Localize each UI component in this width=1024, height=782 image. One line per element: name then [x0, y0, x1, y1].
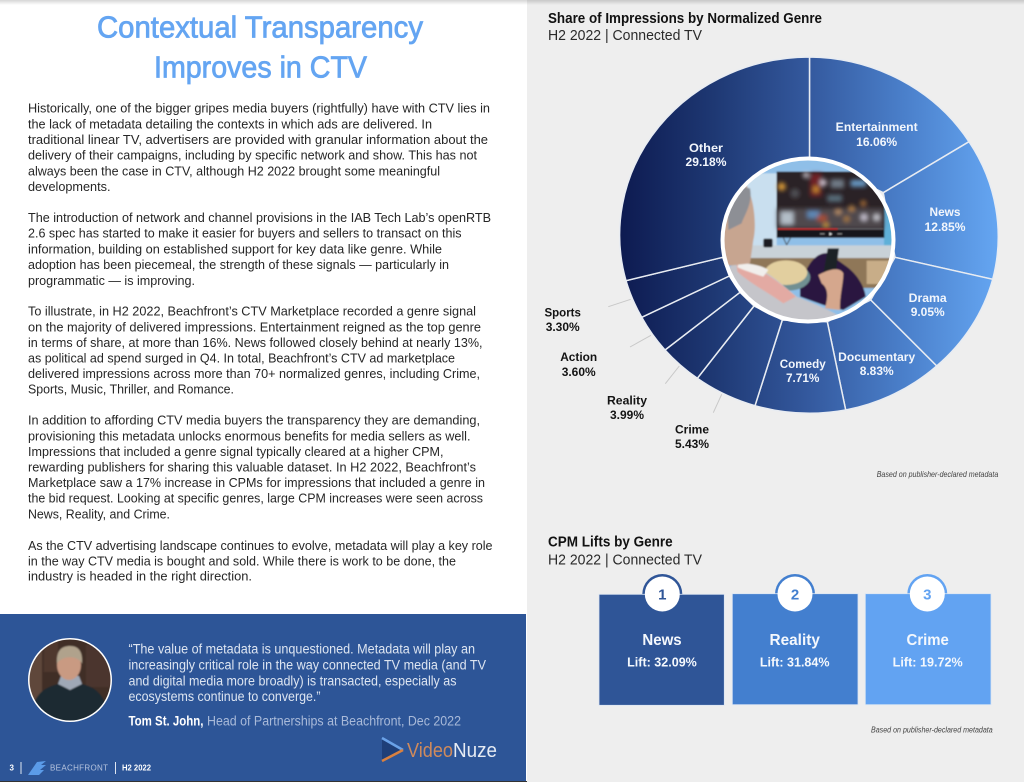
card: Reality: Lift: 31.84%: [760, 656, 830, 670]
card: Reality: [732, 574, 858, 705]
photo: Tom St. John headshot: [28, 638, 112, 722]
label: Other: Other: [689, 141, 723, 155]
title: [97, 10, 423, 84]
label: Drama: Drama: [909, 291, 947, 305]
hand and remote: [824, 248, 840, 272]
text block: paragraph 3: in terms of share, at more than 16%. News followed closely behind at nearly 13%,: [28, 335, 482, 350]
card: Reality: Reality: [770, 632, 820, 649]
segment: Crime: [697, 306, 782, 406]
label: Other: 29.18%: [686, 155, 727, 169]
label: Sports: 3.30%: [546, 320, 580, 334]
label: Drama: [909, 291, 947, 319]
text block: paragraph 5: industry is headed in the right direction.: [28, 569, 252, 584]
quote text: [128, 642, 486, 704]
label: Action: Action: [560, 350, 597, 364]
logo: VideoNuze: [382, 738, 497, 762]
segment: News: [883, 142, 998, 279]
heading: share of impressions: Share of Impressions by Normalized Genre: [548, 11, 822, 27]
label: News: News: [930, 205, 961, 219]
text block: paragraph 3: Sports, Music, Thriller, and Romance.: [28, 382, 234, 396]
source note: cards: Based on publisher-declared metadata: [871, 724, 993, 734]
text block: paragraph 1: traditional linear TV, advertisers are provided with granular information about the: [28, 132, 488, 147]
source note: chart: Based on publisher-declared metadata: [877, 469, 999, 479]
card: News: 1: [658, 586, 666, 604]
leader line: Crime: [713, 394, 722, 413]
quote attribution: Tom St. John,: [128, 714, 204, 728]
label: Documentary: Documentary: [838, 350, 916, 364]
text block: paragraph 1: Historically, one of the bigger gripes media buyers (rightfully) have with CTV lies in: [28, 101, 490, 116]
leader line: Reality: [665, 366, 679, 384]
card: News: Lift: 32.09%: [627, 656, 697, 670]
quote attribution: Head of Partnerships at Beachfront, Dec 2022: [207, 714, 461, 728]
text block: paragraph 4: Marketplace saw a 17% increase in CPMs for impressions that included a genre in: [28, 475, 485, 490]
text block: paragraph 4: In addition to affording CTV media buyers the transparency they are demanding,: [28, 413, 480, 428]
text block: paragraph 2: [28, 210, 491, 288]
leader line: Sports: [608, 299, 631, 307]
right page background: [527, 0, 1024, 782]
label: Entertainment: Entertainment: [836, 120, 918, 134]
legs and cushion: [843, 297, 900, 327]
label: Reality: 3.99%: [610, 408, 644, 422]
quote text: and digital media more broadly) is transacted, especially as: [128, 673, 457, 688]
quote text: ecosystems continue to converge.”: [128, 689, 320, 704]
footer: page number and Beachfront brand: 3: [10, 764, 14, 772]
text block: paragraph 4: Impressions that included a genre signal typically cleared at a higher CPM,: [28, 444, 444, 459]
quote text: increasingly critical role in the way connected TV media (and TV: [128, 658, 486, 673]
text block: paragraph 2: information, building on established support for key data like genre. While: [28, 242, 442, 256]
text block: paragraph 4: rewarding publishers for sharing this valuable dataset. In H2 2022, Beachfront’s: [28, 460, 476, 474]
text block: paragraph 2: 2.6 spec has started to make it easier for buyers and sellers to transact on this: [28, 226, 462, 241]
footer: page number and Beachfront brand: [10, 761, 152, 775]
label: Documentary: 8.83%: [860, 364, 894, 378]
TV screen: [777, 172, 884, 238]
segment: Documentary: [827, 300, 937, 410]
text block: paragraph 3: on the majority of delivered impressions. Entertainment reigned as the top genre: [28, 319, 481, 334]
furniture: [743, 245, 897, 259]
segment: Action: [642, 276, 740, 350]
text block: paragraph 5: As the CTV advertising landscape continues to evolve, metadata will play a key role: [28, 538, 492, 553]
footer: page number and Beachfront brand: H2 2022: [122, 764, 152, 772]
text block: paragraph 2: The introduction of network and channel provisions in the IAB Tech Lab’s openRTB: [28, 210, 491, 225]
photo: person watching TV with popcorn: [720, 153, 900, 327]
card: Crime: Lift: 19.72%: [893, 656, 963, 670]
text block: paragraph 2: programmatic — is improving.: [28, 273, 195, 288]
text block: paragraph 2: adoption has been piecemeal, the strength of these signals — particularly in: [28, 257, 449, 272]
text block: paragraph 5: [28, 538, 492, 584]
text block: paragraph 4: provisioning this metadata unlocks enormous benefits for media sellers as well.: [28, 428, 470, 443]
quote text: “The value of metadata is unquestioned. Metadata will play an: [128, 642, 475, 657]
text block: paragraph 4: the bid request. Looking at specific genres, large CPM increases were seen across: [28, 491, 483, 506]
text block: paragraph 3: as political ad spend surged in Q4. In total, Beachfront’s CTV ad marketplace: [28, 351, 455, 366]
label: Entertainment: [836, 120, 918, 149]
heading: share of impressions: [548, 11, 822, 44]
label: Sports: [544, 306, 581, 334]
segment: Sports: [626, 257, 729, 317]
person: [730, 264, 838, 320]
card: News: News: [642, 632, 682, 649]
label: News: 12.85%: [924, 220, 966, 234]
card: Crime: Crime: [907, 632, 949, 649]
label: Comedy: 7.71%: [786, 371, 820, 385]
heading: CPM lifts: CPM Lifts by Genre: [548, 534, 673, 550]
segment: Drama: [871, 257, 993, 366]
title: Improves in CTV: [154, 50, 367, 84]
label: Comedy: Comedy: [780, 357, 826, 371]
text block: paragraph 3: To illustrate, in H2 2022, Beachfront’s CTV Marketplace recorded a genre signal: [28, 304, 476, 319]
label: News: [924, 205, 966, 234]
card: Reality: 2: [791, 586, 799, 604]
label: Crime: Crime: [675, 422, 709, 436]
card: News: [599, 574, 724, 705]
label: Reality: [607, 394, 647, 422]
footer: page number and Beachfront brand: BEACHFRONT: [50, 764, 108, 772]
label: Crime: [675, 422, 709, 451]
label: Sports: Sports: [544, 306, 581, 320]
leader line: Action: [630, 335, 651, 347]
label: Entertainment: 16.06%: [856, 135, 898, 149]
heading: CPM lifts: [548, 534, 702, 568]
panel: quote: [0, 614, 527, 782]
text block: paragraph 1: the lack of metadata detailing the contexts in which ads are delivered. In: [28, 116, 432, 131]
label: Reality: Reality: [607, 394, 647, 408]
text block: paragraph 5: in the way CTV media is bought and sold. While there is work to be done, the: [28, 553, 456, 568]
text block: paragraph 3: [28, 304, 482, 396]
segment: Other: [620, 57, 810, 281]
label: Comedy: [780, 357, 826, 385]
text block: paragraph 1: always been the case in CTV, although H2 2022 brought some meaningful: [28, 163, 440, 178]
label: Other: [686, 141, 727, 169]
text block: paragraph 1: delivery of their campaigns, including by specific network and show. This has not: [28, 148, 477, 163]
text block: paragraph 1: [28, 101, 490, 194]
label: Action: [560, 350, 597, 379]
label: Documentary: [838, 350, 916, 378]
left page background: [0, 0, 527, 782]
heading: CPM lifts: H2 2022 | Connected TV: [548, 552, 702, 568]
bowl and popcorn: [783, 270, 812, 292]
text block: paragraph 3: delivered impressions across more than 70+ normalized genres, including Crime,: [28, 366, 480, 381]
card: Crime: 3: [923, 586, 931, 604]
text block: paragraph 4: News, Reality, and Crime.: [28, 506, 170, 521]
segment: Reality: [665, 292, 754, 378]
label: Drama: 9.05%: [911, 305, 945, 319]
logo: VideoNuze: Nuze: [453, 740, 497, 762]
label: Crime: 5.43%: [675, 437, 709, 451]
segment: Comedy: [755, 320, 846, 413]
card: Crime: [865, 574, 991, 705]
label: Action: 3.60%: [562, 365, 596, 379]
logo: VideoNuze: Video: [407, 740, 453, 762]
donut chart: share by genre: [544, 57, 998, 451]
text block: paragraph 1: developments.: [28, 179, 110, 194]
segment: Entertainment: [810, 57, 969, 193]
text block: paragraph 4: [28, 413, 485, 521]
title: Contextual Transparency: [97, 10, 423, 44]
heading: share of impressions: H2 2022 | Connected TV: [548, 27, 702, 44]
